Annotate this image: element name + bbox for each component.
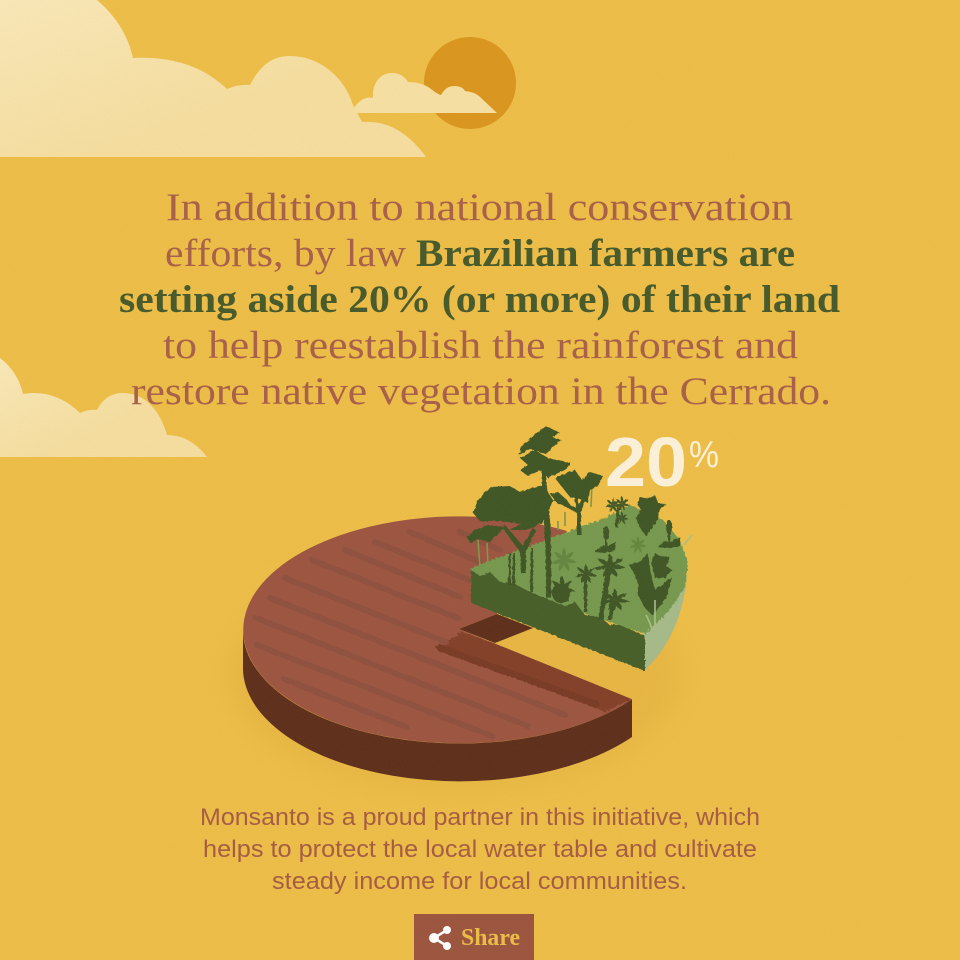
soil detail clipped to the top face <box>256 532 640 736</box>
big right plant <box>629 553 672 615</box>
pie shadow <box>230 560 680 790</box>
partner note text: steady income for local communities. <box>272 868 687 895</box>
palm group <box>574 554 631 620</box>
partner note text: Monsanto is a proud partner in this initiative, which <box>200 804 760 831</box>
share button <box>414 914 534 960</box>
cloud: large top left <box>0 0 426 157</box>
notch inner wall <box>459 614 533 643</box>
upper small palm <box>605 496 630 527</box>
big left tree <box>467 485 553 573</box>
slice ground <box>471 505 688 671</box>
heading text: efforts, by law <box>165 232 406 275</box>
tall tree <box>519 426 571 598</box>
slice front soil <box>471 570 645 671</box>
heading text: In addition to national conservation <box>166 186 793 229</box>
20% label: % <box>689 434 719 476</box>
pie top face <box>243 516 632 743</box>
partner note text <box>200 804 760 895</box>
icon: share <box>429 926 451 950</box>
slice top face <box>471 505 688 634</box>
furrows <box>256 532 565 736</box>
faded understory plants <box>551 536 647 572</box>
back trees and canopy <box>467 426 603 598</box>
20% label: 20 <box>605 423 687 501</box>
cloud: left middle <box>0 358 207 457</box>
sun <box>424 37 516 129</box>
mid right plant <box>658 520 680 548</box>
pie chart: farmland 80% <box>243 516 640 781</box>
upper right plant <box>636 495 666 536</box>
dark grass stems <box>508 548 533 592</box>
right canopy tree <box>550 470 603 535</box>
mid left plant <box>595 526 616 553</box>
slice curved side <box>644 575 687 671</box>
forest shadow on soil <box>437 632 640 712</box>
heading text <box>119 186 840 413</box>
heading text: Brazilian farmers are <box>416 232 795 275</box>
share button: Share <box>461 925 520 951</box>
pale grass tufts <box>646 535 692 630</box>
bush <box>549 576 575 603</box>
heading text: setting aside 20% (or more) of their land <box>119 278 840 321</box>
heading text: restore native vegetation in the Cerrado. <box>131 370 831 413</box>
olive grass behind the slice <box>478 484 592 567</box>
foreground plants on the slice <box>549 495 680 620</box>
20% label <box>605 423 719 501</box>
pie side wall <box>243 630 632 781</box>
cloud: small in front of sun <box>353 73 497 113</box>
forest slice: 20% <box>467 426 692 671</box>
partner note text: helps to protect the local water table and cultivate <box>203 836 757 863</box>
heading text: to help reestablish the rainforest and <box>163 324 799 367</box>
